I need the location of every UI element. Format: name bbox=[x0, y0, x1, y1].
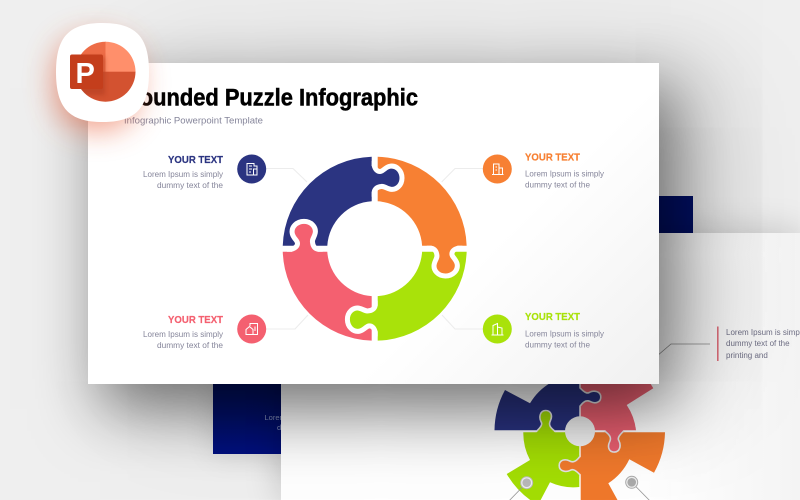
panel: main slide bbox=[88, 63, 659, 384]
callout: bottom right: dummy text of the bbox=[525, 340, 591, 350]
text block: side note: printing and bbox=[726, 351, 768, 360]
callout: bottom left: Lorem Ipsum is simply bbox=[143, 330, 223, 339]
callout: top right: YOUR TEXT bbox=[525, 152, 581, 164]
centre hole bbox=[565, 416, 595, 446]
callout: top left: dummy text of the bbox=[157, 181, 224, 190]
callout: bottom right: Lorem Ipsum is simply bbox=[525, 330, 604, 338]
icon: navy building bbox=[237, 154, 266, 184]
callout: top right: dummy text of the bbox=[525, 180, 591, 190]
callout: bottom right: YOUR TEXT bbox=[525, 311, 581, 323]
badge body bbox=[56, 23, 149, 122]
green tab bbox=[350, 305, 381, 331]
icon: green building bbox=[483, 314, 512, 344]
orange tab bbox=[560, 456, 582, 476]
callout: top left: YOUR TEXT bbox=[168, 154, 224, 166]
text block: side note: dummy text of the bbox=[726, 339, 790, 348]
text block: side note bbox=[717, 326, 800, 361]
pink tab bbox=[292, 224, 318, 255]
background navy block right bbox=[560, 196, 693, 236]
green quarter bbox=[378, 252, 467, 341]
icon: orange building bbox=[483, 154, 512, 184]
pink tab bbox=[604, 429, 624, 451]
marker: lower right bbox=[626, 476, 654, 500]
connector line bbox=[650, 344, 710, 362]
background navy block left with clipped text: Lorem bbox=[264, 413, 286, 422]
callout: bottom left: dummy text of the bbox=[157, 341, 224, 350]
green tab bbox=[536, 411, 556, 433]
P tile: P bbox=[76, 58, 95, 90]
puzzle ring bbox=[283, 157, 467, 341]
navy tab bbox=[368, 166, 400, 192]
callout: bottom left: YOUR TEXT bbox=[168, 314, 224, 326]
pie logo bbox=[81, 42, 136, 102]
title: Rounded Puzzle Infographic bbox=[124, 84, 418, 112]
callout: top left bbox=[143, 154, 224, 190]
navy quarter bbox=[283, 157, 372, 246]
navy tab bbox=[578, 387, 600, 407]
text block: side note: Lorem Ipsum is simp bbox=[726, 328, 800, 337]
callout: bottom right bbox=[525, 311, 604, 350]
callout: top left: Lorem Ipsum is simply bbox=[143, 170, 223, 179]
subtitle: Infographic Powerpoint Template bbox=[124, 116, 263, 126]
callout: top right: Lorem Ipsum is simply bbox=[525, 170, 604, 178]
panel: background slide bbox=[281, 233, 800, 500]
icon: pink house bbox=[237, 314, 266, 344]
pink piece bbox=[581, 345, 653, 430]
green piece bbox=[507, 432, 579, 500]
orange tab bbox=[431, 242, 457, 274]
marker: lower left bbox=[505, 477, 533, 500]
badge glow bbox=[54, 36, 139, 130]
callout: top right bbox=[525, 152, 604, 190]
P tile bbox=[70, 54, 103, 90]
navy piece bbox=[494, 375, 579, 430]
background navy block left with clipped text: d bbox=[277, 423, 281, 432]
callout: bottom left bbox=[143, 314, 224, 350]
background navy block left with clipped text bbox=[213, 384, 303, 454]
puzzle diagram bbox=[494, 384, 665, 500]
orange quarter bbox=[378, 157, 467, 246]
orange piece bbox=[581, 432, 665, 500]
connector lines bbox=[266, 168, 483, 329]
icon: PowerPoint app badge bbox=[34, 17, 158, 149]
pink quarter bbox=[283, 252, 372, 341]
